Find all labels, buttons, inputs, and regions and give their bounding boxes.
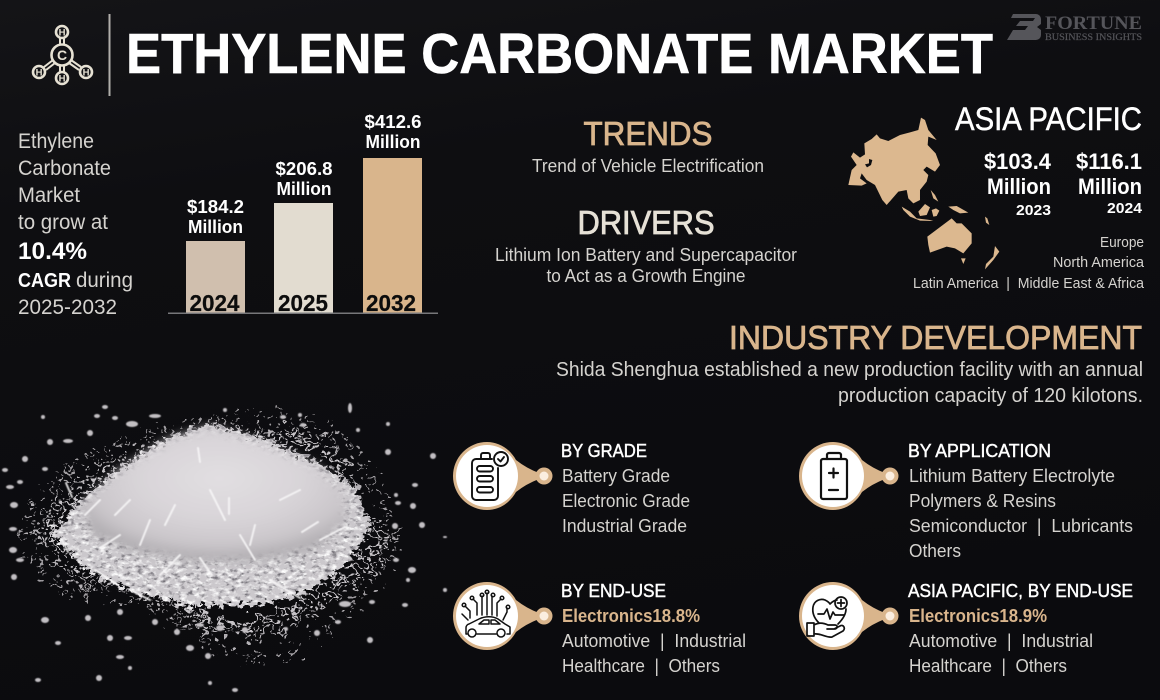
list: Healthcare | Others xyxy=(562,656,720,676)
list: Others xyxy=(909,541,961,561)
icon: methane molecule: C xyxy=(57,47,67,63)
icon: battery with check xyxy=(453,442,552,510)
list: Polymers & Resins xyxy=(909,491,1056,511)
list xyxy=(562,631,746,676)
asia pacific 2023 value: Million xyxy=(987,174,1051,199)
list: Automotive | Industrial xyxy=(562,631,746,651)
other regions: Europe xyxy=(1100,235,1144,251)
asia pacific 2024 value: $116.1 xyxy=(1076,149,1142,174)
list: Automotive | Industrial xyxy=(909,631,1093,651)
asia pacific 2024 value: Million xyxy=(1078,174,1142,199)
icon: methane molecule: H xyxy=(59,74,66,84)
icon: methane molecule: H xyxy=(83,68,90,78)
icon: hand holding heart xyxy=(799,582,898,650)
industry development text: Shida Shenghua established a new production facility with an annual xyxy=(556,359,1143,381)
icon: connected car xyxy=(453,582,552,650)
list: Lithium Battery Electrolyte xyxy=(909,466,1115,486)
asia pacific 2024 value xyxy=(1076,149,1143,217)
CAGR text block: Carbonate xyxy=(18,157,111,180)
highlight: Electronics18.8% xyxy=(562,606,700,626)
bar 2024: $184.2 xyxy=(187,197,244,217)
bar 2024 xyxy=(186,197,245,316)
title divider xyxy=(108,14,110,96)
other regions: North America xyxy=(1053,255,1145,271)
other regions: Latin America | Middle East & Africa xyxy=(913,276,1145,292)
CAGR text block: during xyxy=(76,269,133,292)
CAGR text block: CAGR xyxy=(18,270,71,292)
asia pacific 2023 value xyxy=(984,149,1052,219)
bar 2025: Million xyxy=(276,179,332,199)
heading: BY GRADE xyxy=(561,441,647,461)
logo: Fortune Business Insights: FORTUNE xyxy=(1045,13,1142,34)
photo: white crystal pile xyxy=(2,403,447,692)
industry development text: production capacity of 120 kilotons. xyxy=(838,385,1143,407)
list: Industrial Grade xyxy=(562,516,687,536)
logo: Fortune Business Insights: BUSINESS INSIGHTS xyxy=(1045,33,1142,43)
bar 2024: Million xyxy=(188,217,243,237)
bar 2025 xyxy=(274,159,333,316)
industry development heading: INDUSTRY DEVELOPMENT xyxy=(729,319,1142,356)
bar 2025: $206.8 xyxy=(276,159,332,179)
logo: Fortune Business Insights xyxy=(1007,13,1142,43)
heading: BY END-USE xyxy=(561,581,666,601)
list xyxy=(909,631,1093,676)
drivers text: Lithium Ion Battery and Supercapacitor xyxy=(495,245,797,265)
list: Healthcare | Others xyxy=(909,656,1067,676)
list: Battery Grade xyxy=(562,466,670,486)
drivers text xyxy=(495,245,797,286)
asia pacific 2023 value: $103.4 xyxy=(984,149,1052,174)
list xyxy=(562,466,690,536)
bar 2032: $412.6 xyxy=(364,112,422,132)
category: by grade xyxy=(453,441,690,536)
icon: battery plus minus xyxy=(799,442,898,510)
bar 2032: Million xyxy=(366,132,420,152)
trends text: Trend of Vehicle Electrification xyxy=(532,156,764,176)
CAGR text block: Ethylene xyxy=(18,130,94,153)
asia pacific 2024 value: 2024 xyxy=(1107,200,1143,217)
icon: methane molecule: H xyxy=(36,68,43,78)
map: Asia Pacific xyxy=(848,118,999,269)
CAGR text block: to grow at xyxy=(18,211,108,234)
list: Semiconductor | Lubricants xyxy=(909,516,1133,536)
CAGR text block: 2025-2032 xyxy=(18,296,117,319)
drivers text: to Act as a Growth Engine xyxy=(546,266,746,286)
industry development text xyxy=(556,359,1143,407)
drivers heading: DRIVERS xyxy=(578,204,714,241)
list: Electronic Grade xyxy=(562,491,690,511)
CAGR text block: Market xyxy=(18,184,80,207)
category: asia pacific by end-use xyxy=(799,581,1133,676)
category: by application xyxy=(799,441,1133,561)
CAGR text block xyxy=(18,130,133,319)
other regions xyxy=(913,235,1145,292)
trends heading: TRENDS xyxy=(584,115,712,152)
icon: methane molecule xyxy=(33,26,92,84)
bar 2032: 2032 xyxy=(366,290,416,316)
bar chart xyxy=(168,112,438,316)
CAGR text block: 10.4% xyxy=(18,238,87,265)
heading: ASIA PACIFIC, BY END-USE xyxy=(908,581,1133,601)
category: by end-use xyxy=(453,581,746,676)
bar 2024: 2024 xyxy=(190,290,240,316)
asia pacific heading: ASIA PACIFIC xyxy=(955,101,1142,137)
bar 2025: 2025 xyxy=(278,290,328,316)
asia pacific 2023 value: 2023 xyxy=(1016,202,1051,219)
icon: methane molecule: H xyxy=(59,28,66,38)
bar 2032 xyxy=(363,112,422,316)
title: ETHYLENE CARBONATE MARKET xyxy=(126,22,993,86)
highlight: Electronics18.9% xyxy=(909,606,1047,626)
list xyxy=(909,466,1133,561)
heading: BY APPLICATION xyxy=(908,441,1051,461)
